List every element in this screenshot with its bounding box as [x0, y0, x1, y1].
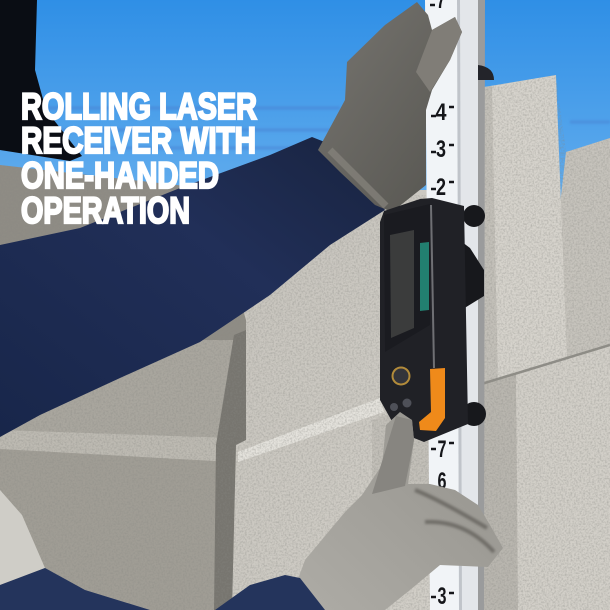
hood — [0, 0, 82, 161]
concrete wall: left blocks — [0, 165, 250, 610]
headline: OPERATION — [21, 190, 190, 231]
small buttons — [390, 398, 412, 411]
sky background — [0, 0, 610, 400]
lower light jacket — [0, 490, 45, 585]
headline — [21, 86, 257, 231]
rod scale numerals — [436, 0, 447, 610]
levelling rod — [425, 0, 485, 610]
green LED panel — [420, 242, 429, 311]
rod tick marks — [430, 5, 454, 597]
concrete block: lower right — [478, 345, 610, 610]
concrete block: tall right block — [478, 75, 568, 392]
concrete block: far right — [540, 138, 610, 380]
upper glove — [318, 2, 462, 212]
receiver body — [380, 198, 468, 442]
headline: RECEIVER WITH — [21, 120, 256, 161]
rod scale numerals: 2 — [436, 174, 446, 201]
power button with orange ring — [392, 366, 410, 386]
rod scale numerals: 4 — [436, 99, 447, 126]
rear bracket and knobs — [463, 205, 485, 227]
display bezel — [384, 204, 430, 352]
concrete wall: middle blocks — [232, 190, 490, 610]
power lines — [0, 108, 610, 148]
LCD screen — [390, 230, 414, 338]
lower glove with pointing finger — [291, 412, 503, 610]
upper arm sleeve — [0, 137, 385, 437]
rod scale numerals: 7 — [438, 436, 446, 463]
headline: ONE-HANDED — [21, 155, 219, 196]
rod scale numerals: 3 — [438, 583, 446, 610]
rod scale numerals: 3 — [436, 136, 446, 163]
headline: ROLLING LASER — [21, 86, 257, 127]
grey edge trim — [431, 205, 434, 368]
rod scale numerals: 6 — [438, 468, 446, 495]
orange accent — [419, 368, 445, 431]
rear rod clamp knobs top — [478, 65, 494, 80]
lower sleeve — [0, 568, 325, 610]
laser receiver — [380, 198, 486, 442]
